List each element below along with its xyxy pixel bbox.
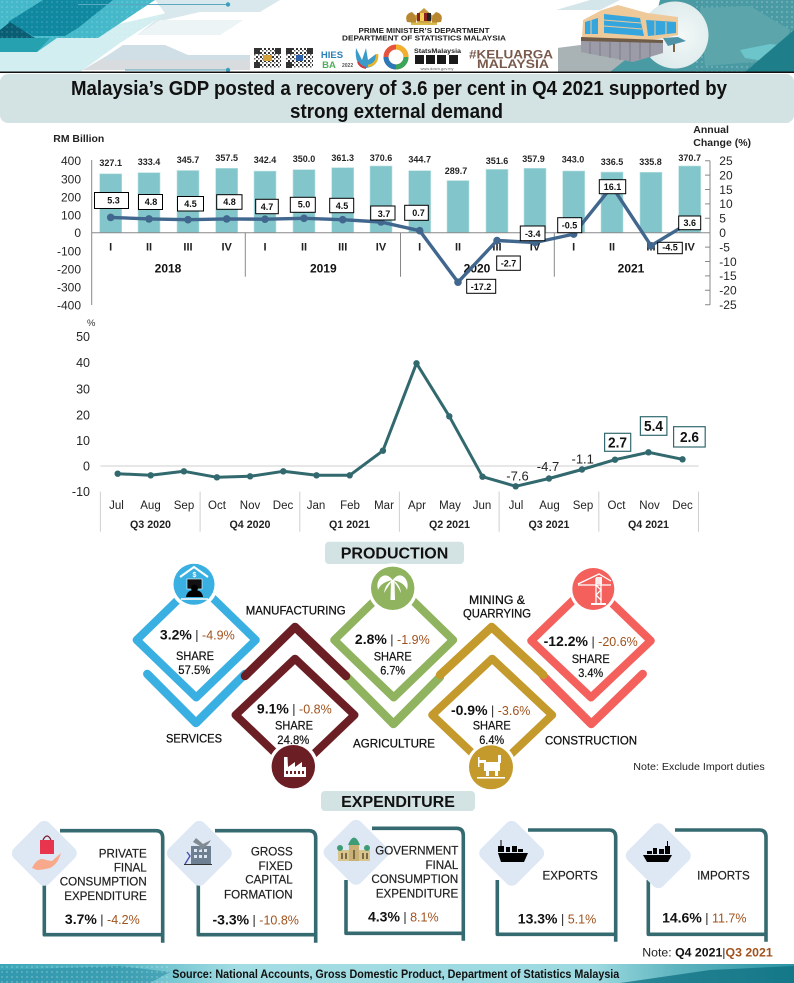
y axis labels: 30 <box>76 382 90 396</box>
card: exports <box>476 818 616 942</box>
quarter labels: IV <box>376 242 387 254</box>
icon: export ship <box>498 840 528 862</box>
monthly data labels: -7.6 <box>506 468 529 484</box>
quarter labels: II <box>301 242 307 254</box>
left axis labels: -100 <box>57 244 81 258</box>
Q4 2021 callouts <box>605 417 705 452</box>
stats: construction <box>544 633 638 680</box>
quarter labels: Q3 2020 <box>130 519 171 531</box>
card: private final consumption: PRIVATE <box>99 847 147 860</box>
bar value labels: 357.9 <box>522 154 545 164</box>
quarter labels: Q4 2020 <box>229 519 271 531</box>
heading: production: PRODUCTION <box>341 546 448 562</box>
bar value labels: 351.6 <box>486 156 508 166</box>
header banner <box>0 0 794 72</box>
right axis title: Change (%) <box>693 137 751 149</box>
quarter labels: Q3 2021 <box>528 519 570 531</box>
annual change callouts: -0.5 <box>562 220 577 230</box>
diamond: mining and quarrying <box>432 627 552 772</box>
stats: mining and quarrying: SHARE <box>473 721 511 733</box>
sector names: MINING & <box>469 595 525 607</box>
month labels: May <box>439 500 461 512</box>
stats: agriculture: SHARE <box>374 652 412 664</box>
icon: government building <box>337 838 370 861</box>
bar value labels: 336.5 <box>601 157 623 167</box>
annual change callouts: 16.1 <box>604 182 621 192</box>
bar value labels: 327.1 <box>99 158 122 168</box>
bar value labels: 335.8 <box>639 157 662 167</box>
bar value labels: 361.3 <box>331 153 354 163</box>
annual change callouts: -17.2 <box>471 282 491 292</box>
month labels: Dec <box>672 500 693 512</box>
icon: services: $ <box>193 572 197 579</box>
annual change callouts: -3.4 <box>525 229 540 239</box>
bar value labels: 289.7 <box>445 166 467 176</box>
icon: QR code 1 <box>254 48 281 68</box>
right axis labels: -15 <box>719 269 737 283</box>
heading: production <box>325 542 464 564</box>
icon: HIES BA logo: 2022 <box>342 63 353 69</box>
title panel: Malaysia’s GDP posted a recovery of 3.6 per cent in Q4 2021 supported by <box>71 77 728 100</box>
icon: census hand logo <box>356 48 377 68</box>
left axis labels: 200 <box>61 190 81 204</box>
annual change callouts: 4.5 <box>184 199 197 209</box>
quarter labels: I <box>109 242 112 254</box>
left axis labels: 100 <box>61 208 81 222</box>
card: imports: 14.6% | 11.7% <box>662 909 747 925</box>
right axis labels: 20 <box>719 168 733 182</box>
icon: shopping bag in hand <box>32 836 61 870</box>
left axis labels: 400 <box>61 154 81 168</box>
Keluarga Malaysia logo: MALAYSIA <box>477 59 549 71</box>
quarter labels <box>109 242 696 254</box>
quarter labels: II <box>455 242 461 254</box>
quarter labels: III <box>338 242 347 254</box>
StatsMalaysia social block: www.dosm.gov.my <box>420 66 454 71</box>
decorative right photo and building <box>556 0 794 72</box>
quarter labels: II <box>609 242 615 254</box>
annual change callouts <box>94 180 701 293</box>
month labels: Sep <box>573 500 593 512</box>
stats: construction: SHARE <box>572 654 610 666</box>
card: government final consumption <box>321 817 463 941</box>
y axis labels: 0 <box>83 460 90 474</box>
Q4 2021 callouts: 5.4 <box>644 419 663 435</box>
Keluarga Malaysia logo <box>469 50 553 71</box>
annual change callouts: -4.5 <box>662 242 678 252</box>
y axis labels: 50 <box>76 330 90 344</box>
right axis labels: 5 <box>719 212 726 226</box>
quarter labels: I <box>572 242 575 254</box>
stats: services <box>160 626 235 677</box>
card: private final consumption: FINAL <box>114 862 147 875</box>
right axis labels: -5 <box>719 240 730 254</box>
card: imports: IMPORTS <box>697 870 750 883</box>
card: government final consumption: CONSUMPTION <box>371 873 458 886</box>
card: gross fixed capital formation <box>164 818 316 943</box>
icon: manufacturing factory <box>268 742 318 792</box>
bar value labels: 350.0 <box>293 154 315 164</box>
icon: services <box>170 560 218 608</box>
stats: manufacturing: SHARE <box>275 721 313 733</box>
bar value labels: 370.7 <box>678 153 701 163</box>
card: gross fixed capital formation: CAPITAL <box>245 874 293 887</box>
y axis labels: 20 <box>76 408 90 422</box>
y axis labels: -10 <box>72 485 90 499</box>
month labels: Dec <box>273 500 293 512</box>
card: government final consumption: EXPENDITURE <box>376 888 459 901</box>
bars <box>100 166 701 233</box>
annual change callouts: 4.8 <box>145 197 157 207</box>
stats: manufacturing: 24.8% <box>277 735 309 747</box>
quarter labels: IV <box>221 242 233 254</box>
card: exports: EXPORTS <box>542 870 598 883</box>
annual change callouts: -2.7 <box>501 258 516 268</box>
month labels: Jul <box>109 500 124 512</box>
note: quarter legend: Note: Q4 2021|Q3 2021 <box>642 946 773 960</box>
stats: services: 57.5% <box>178 665 210 677</box>
annual change callouts: 3.6 <box>683 218 696 228</box>
annual change callouts: 4.8 <box>223 197 236 207</box>
icon: plane over buildings <box>184 838 212 864</box>
month labels: Oct <box>208 500 227 512</box>
bar value labels: 342.4 <box>254 155 276 165</box>
month labels: Nov <box>639 500 660 512</box>
left axis labels: -200 <box>57 262 81 276</box>
month labels: Jun <box>473 500 491 512</box>
panel: production diamonds <box>137 560 765 792</box>
month labels: Mar <box>374 500 394 512</box>
right axis labels: -10 <box>719 255 737 269</box>
y axis labels: 10 <box>76 434 90 448</box>
StatsMalaysia social block: StatsMalaysia <box>414 48 462 55</box>
sector names <box>166 595 637 751</box>
right axis labels <box>719 154 737 312</box>
chart: monthly GDP line <box>72 318 705 532</box>
stats: agriculture <box>355 631 430 678</box>
card: gross fixed capital formation: GROSS <box>251 846 293 859</box>
stats: construction: -12.2% | -20.6% <box>544 633 638 649</box>
year labels: 2018 <box>155 262 182 276</box>
icon: HIES BA logo: HIES <box>321 50 343 61</box>
right axis title: Annual <box>693 124 729 136</box>
bar value labels: 357.5 <box>215 153 238 163</box>
bar value labels: 345.7 <box>177 155 199 165</box>
quarter labels <box>130 519 669 531</box>
month labels: Jan <box>307 500 325 512</box>
right axis labels: -20 <box>719 284 737 298</box>
quarter labels: III <box>183 242 193 254</box>
stats: construction: 3.4% <box>578 668 603 680</box>
icon: mining oil rig <box>466 742 516 792</box>
logo strip <box>250 45 558 71</box>
year labels: 2020 <box>464 262 491 276</box>
quarter labels: Q1 2021 <box>329 519 370 531</box>
title panel: strong external demand <box>290 100 503 123</box>
month labels: Jul <box>509 500 523 512</box>
quarter labels: I <box>263 242 267 254</box>
title panel <box>0 74 794 123</box>
quarter labels: III <box>492 242 502 254</box>
icon: SDG wheel <box>386 47 406 67</box>
note: import duties: Note: Exclude Import duties <box>633 761 765 773</box>
stats: services: 3.2% | -4.9% <box>160 626 235 642</box>
y axis labels: 40 <box>76 356 90 370</box>
card: exports: 13.3% | 5.1% <box>518 910 596 926</box>
icon: agriculture palm <box>368 563 418 613</box>
stats: mining and quarrying: 6.4% <box>479 735 504 747</box>
chart: quarterly GDP bars with annual change line <box>53 124 751 312</box>
left axis labels: -300 <box>57 280 81 294</box>
card: private final consumption: CONSUMPTION <box>60 876 147 889</box>
card: imports <box>623 820 766 942</box>
quarter labels: III <box>646 242 656 254</box>
sector names: QUARRYING <box>463 608 531 620</box>
left axis labels: 0 <box>74 226 81 240</box>
right axis labels: 10 <box>719 197 733 211</box>
stats: services: SHARE <box>176 651 214 663</box>
StatsMalaysia social block <box>414 48 462 71</box>
quarter labels: II <box>146 242 152 254</box>
stats: mining and quarrying <box>451 702 530 747</box>
right axis labels: -25 <box>719 298 737 312</box>
stats: mining and quarrying: -0.9% | -3.6% <box>451 702 530 718</box>
card: private final consumption: EXPENDITURE <box>64 890 147 903</box>
monthly data labels <box>506 452 594 484</box>
annual change callouts: 5.0 <box>298 200 310 210</box>
diamond: agriculture <box>334 582 453 724</box>
card: private final consumption: 3.7% | -4.2% <box>65 911 140 927</box>
header rule <box>0 72 794 73</box>
card: gross fixed capital formation: -3.3% | -10.8% <box>213 911 299 927</box>
quarter labels: Q4 2021 <box>628 519 669 531</box>
axes <box>92 160 710 305</box>
year labels: 2019 <box>310 262 337 276</box>
diamond: manufacturing <box>236 627 354 772</box>
footer band: Source: National Accounts, Gross Domestic Product, Department of Statistics Malaysia <box>172 969 620 981</box>
month labels: Aug <box>539 500 560 512</box>
annual change line <box>107 182 693 286</box>
Q4 2021 callouts: 2.7 <box>608 436 627 452</box>
diamond: services <box>137 582 256 723</box>
footer band <box>0 964 794 983</box>
annual change callouts: 5.3 <box>107 196 120 206</box>
Keluarga Malaysia logo: #KELUARGA <box>469 50 553 62</box>
Q4 2021 callouts: 2.6 <box>680 430 699 446</box>
month labels: Nov <box>240 500 260 512</box>
stats: manufacturing <box>257 700 332 747</box>
panel: expenditure cards <box>9 817 766 943</box>
sector names: CONSTRUCTION <box>545 736 637 748</box>
monthly line <box>114 360 686 489</box>
icon: import ship <box>643 841 672 862</box>
icon: national crest <box>406 8 442 25</box>
quarter labels: IV <box>530 242 541 254</box>
right axis labels: 15 <box>719 183 733 197</box>
month labels: Apr <box>408 500 426 512</box>
annual change callouts: 3.7 <box>378 209 390 219</box>
decorative left geometric shapes <box>0 0 280 72</box>
left axis title: RM Billion <box>53 133 104 145</box>
year labels: 2021 <box>618 262 645 276</box>
monthly data labels: -1.1 <box>571 452 594 466</box>
left axis labels <box>57 154 81 312</box>
y axis labels <box>72 330 90 499</box>
department name: PRIME MINISTER’S DEPARTMENT <box>358 26 490 35</box>
bar value labels: 343.0 <box>562 154 584 164</box>
left axis labels: 300 <box>61 172 81 186</box>
bar value labels <box>99 153 701 176</box>
stats: manufacturing: 9.1% | -0.8% <box>257 700 332 716</box>
card: gross fixed capital formation: FORMATION <box>224 889 293 902</box>
department name: DEPARTMENT OF STATISTICS MALAYSIA <box>342 33 507 42</box>
heading: expenditure <box>321 791 475 811</box>
month labels: Feb <box>340 500 360 512</box>
bar value labels: 344.7 <box>408 154 431 164</box>
bar value labels: 333.4 <box>138 157 160 167</box>
month labels: Sep <box>174 500 194 512</box>
month labels: Oct <box>608 500 626 512</box>
right axis title <box>693 124 751 149</box>
annual change callouts: 4.7 <box>261 202 273 212</box>
sector names: MANUFACTURING <box>246 606 346 618</box>
left axis labels: -400 <box>57 298 81 312</box>
gridlines and separators <box>100 466 698 532</box>
diamond: construction <box>531 583 651 724</box>
monthly data labels: -4.7 <box>537 459 559 474</box>
month labels: Aug <box>140 500 161 512</box>
card: government final consumption: GOVERNMENT <box>375 845 458 858</box>
card: gross fixed capital formation: FIXED <box>259 860 293 873</box>
quarter labels: I <box>418 242 421 254</box>
stats: agriculture: 6.7% <box>380 666 405 678</box>
icon: QR code 2 <box>286 48 313 68</box>
icon: HIES BA logo: BA <box>322 60 336 71</box>
department name <box>342 26 507 42</box>
sector names: AGRICULTURE <box>353 739 435 751</box>
quarter labels: IV <box>684 242 696 254</box>
month labels <box>109 500 693 512</box>
stats: agriculture: 2.8% | -1.9% <box>355 631 430 647</box>
quarter labels: Q2 2021 <box>429 519 470 531</box>
bar value labels: 370.6 <box>370 153 392 163</box>
heading: expenditure: EXPENDITURE <box>341 794 455 811</box>
right axis labels: 25 <box>719 154 733 168</box>
card: government final consumption: FINAL <box>425 859 459 872</box>
sector names: SERVICES <box>166 734 222 746</box>
percent unit label: % <box>87 318 96 329</box>
year labels <box>155 262 645 276</box>
icon: HIES BA logo <box>321 50 353 71</box>
card: government final consumption: 4.3% | 8.1% <box>368 909 439 925</box>
annual change callouts: 4.5 <box>336 201 348 211</box>
card: private final consumption <box>9 818 163 943</box>
icon: construction crane <box>569 565 617 613</box>
right axis labels: 0 <box>719 226 726 240</box>
annual change callouts: 0.7 <box>412 208 425 218</box>
